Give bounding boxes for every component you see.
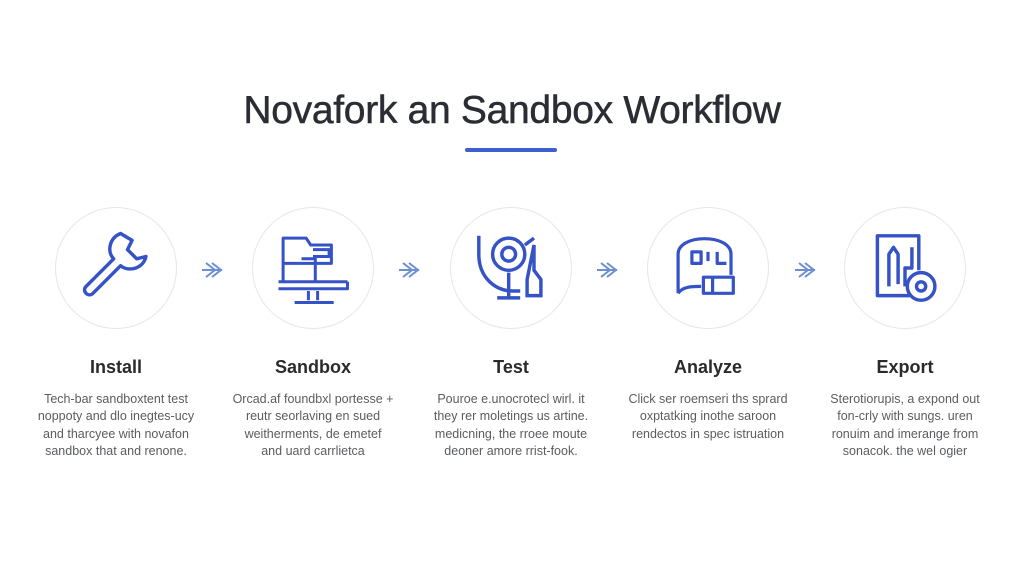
description: weitherments, de emetef (245, 427, 381, 441)
description: medicning, the rroee moute (435, 427, 587, 441)
arrow 3 (597, 262, 618, 278)
heading: Export (876, 357, 934, 377)
icon: export (844, 207, 966, 329)
heading: Test (493, 357, 529, 377)
description (233, 392, 393, 458)
icon: target (450, 207, 572, 329)
description: rendectos in spec istruation (632, 427, 784, 441)
description: ronuim and imerange from (832, 427, 978, 441)
step: analyze (628, 207, 788, 441)
icon: analyze (647, 207, 769, 329)
heading: Install (90, 357, 142, 377)
description (38, 392, 194, 458)
description: Click ser roemseri ths sprard (628, 392, 788, 406)
arrow 1 (202, 262, 222, 278)
description: and uard carrlietca (261, 444, 365, 458)
description: Tech-bar sandboxtent test (44, 392, 188, 406)
description: reutr seorlaving en sued (246, 409, 380, 423)
description: sonacok. the wel ogier (843, 444, 967, 458)
heading: Sandbox (275, 357, 351, 377)
description: noppoty and dlo inegtes-ucy (38, 409, 194, 423)
description: oxptatking inothe saroon (640, 409, 776, 423)
description: Orcad.af foundbxl portesse + (233, 392, 393, 406)
description: sandbox that and renone. (45, 444, 187, 458)
description: they rer moletings us artine. (434, 409, 588, 423)
step: install (38, 207, 194, 458)
icon: wrench (55, 207, 177, 329)
arrow 4 (795, 262, 816, 278)
arrow 2 (399, 262, 420, 278)
description (434, 392, 588, 458)
icon: computer (252, 207, 374, 329)
description: and tharcyee with novafon (43, 427, 189, 441)
description: Sterotiorupis, a expond out (830, 392, 980, 406)
heading: Analyze (674, 357, 742, 377)
step: export (830, 207, 980, 458)
description (628, 392, 788, 441)
step: test (434, 207, 588, 458)
description: Pouroe e.unocrotecl wirl. it (437, 392, 585, 406)
description (830, 392, 980, 458)
description: deoner amore rrist-fook. (444, 444, 578, 458)
title: Novafork an Sandbox Workflow (243, 89, 781, 132)
description: fon-crly with sungs. uren (837, 409, 973, 423)
title underline (465, 148, 557, 152)
step: sandbox (233, 207, 393, 458)
